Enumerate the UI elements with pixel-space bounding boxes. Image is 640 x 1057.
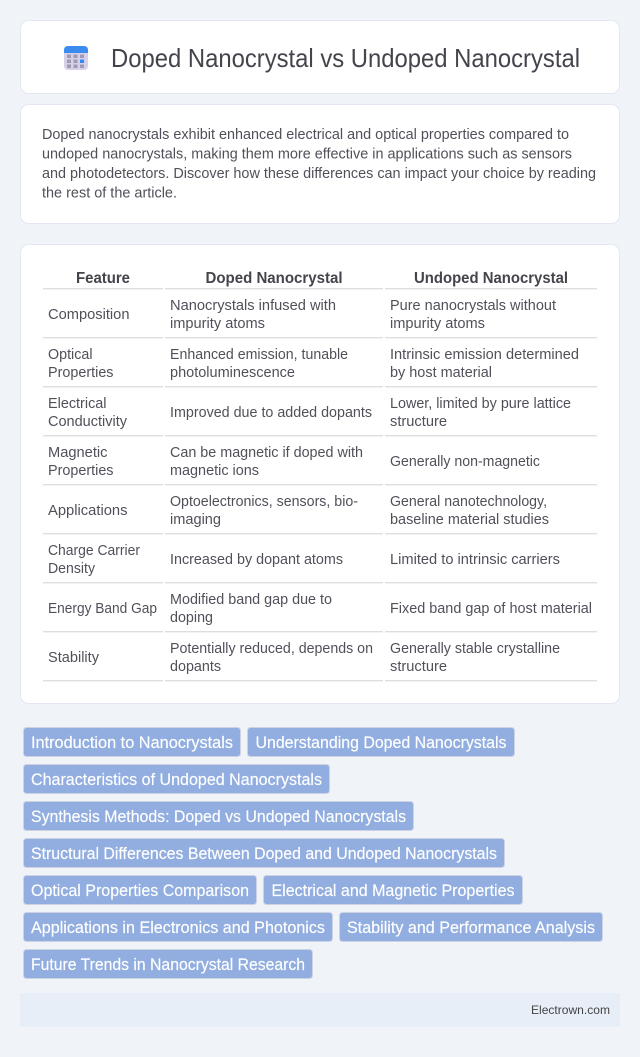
- tag: optical comparison: [24, 876, 256, 904]
- text block: introduction: Doped nanocrystals exhibit enhanced electrical and optical properties compared to: [42, 127, 569, 143]
- row: magnetic properties: magnetic ions: [170, 463, 259, 479]
- row: optical properties: photoluminescence: [170, 365, 295, 381]
- row: magnetic properties: Properties: [48, 463, 114, 479]
- row: optical properties: Intrinsic emission determined: [390, 347, 579, 363]
- tag: applications: [24, 912, 332, 942]
- row: energy band gap: doping: [170, 610, 213, 626]
- topic tags: [24, 728, 602, 978]
- row: applications: [48, 494, 549, 528]
- footer: [20, 993, 620, 1027]
- tag: stability performance: Stability and Performance Analysis: [347, 919, 595, 937]
- row: charge carrier density: Density: [48, 561, 96, 577]
- row: electrical conductivity: [48, 396, 571, 430]
- row: energy band gap: Energy Band Gap: [48, 601, 157, 617]
- row: composition: impurity atoms: [390, 316, 485, 332]
- text block: introduction: [42, 127, 596, 202]
- tag: characteristics undoped: [24, 764, 330, 794]
- row: energy band gap: Modified band gap due to: [170, 592, 332, 608]
- row: stability: Potentially reduced, depends on: [170, 641, 373, 657]
- row: applications: imaging: [170, 512, 221, 528]
- row: electrical conductivity: Conductivity: [48, 414, 128, 430]
- row: electrical conductivity: Electrical: [48, 396, 106, 412]
- panel: header: [20, 20, 620, 94]
- row: magnetic properties: Generally non-magnetic: [390, 454, 540, 470]
- row: stability: Stability: [48, 650, 100, 666]
- row: magnetic properties: [48, 445, 540, 479]
- row: optical properties: [48, 347, 579, 381]
- row: stability: Generally stable crystalline: [390, 641, 560, 657]
- tag: electrical magnetic: [264, 876, 522, 904]
- row: optical properties: Properties: [48, 365, 114, 381]
- tag: optical comparison: Optical Properties Comparison: [31, 882, 249, 900]
- tag: characteristics undoped: Characteristics of Undoped Nanocrystals: [31, 771, 322, 789]
- table header row: Feature: [76, 270, 130, 287]
- row: optical properties: Enhanced emission, tunable: [170, 347, 348, 363]
- text block: introduction: the rest of the article.: [42, 186, 177, 202]
- footer: Electrown.com: [531, 1003, 610, 1017]
- text block: introduction: undoped nanocrystals, making them more effective in applications such as sensors: [42, 146, 572, 162]
- tag: structural differences: Structural Differences Between Doped and Undoped Nanocrystals: [31, 845, 497, 863]
- table header row: Doped Nanocrystal: [206, 270, 342, 287]
- title: Doped Nanocrystal vs Undoped Nanocrystal: [111, 45, 580, 73]
- row: optical properties: by host material: [390, 365, 492, 381]
- row: stability: dopants: [170, 659, 221, 675]
- panel: comparison table: [20, 244, 620, 704]
- tag: synthesis methods: [24, 802, 414, 830]
- row: applications: Applications: [48, 503, 128, 519]
- row: electrical conductivity: Lower, limited by pure lattice: [390, 396, 571, 412]
- row: stability: [48, 641, 560, 675]
- row: electrical conductivity: structure: [390, 414, 447, 430]
- tag: understanding doped: Understanding Doped Nanocrystals: [256, 734, 506, 752]
- tag: understanding doped: [248, 728, 514, 756]
- tag: structural differences: [24, 838, 504, 868]
- row: magnetic properties: Can be magnetic if doped with: [170, 445, 363, 461]
- tag: future trends: [24, 950, 312, 978]
- icon: calendar: [64, 46, 88, 70]
- table header row: [76, 270, 568, 287]
- tag: future trends: Future Trends in Nanocrystal Research: [31, 956, 305, 974]
- panel: introduction: [20, 104, 620, 224]
- tag: introduction: [24, 728, 240, 756]
- row: applications: baseline material studies: [390, 512, 549, 528]
- row: applications: General nanotechnology,: [390, 494, 547, 510]
- table header row: Undoped Nanocrystal: [414, 270, 568, 287]
- row: energy band gap: [48, 592, 592, 626]
- row: electrical conductivity: Improved due to added dopants: [170, 405, 372, 421]
- tag: stability performance: [340, 912, 602, 942]
- row: applications: Optoelectronics, sensors, bio-: [170, 494, 358, 510]
- row: charge carrier density: [48, 543, 560, 577]
- row: stability: structure: [390, 659, 447, 675]
- row: composition: impurity atoms: [170, 316, 265, 332]
- row: composition: Pure nanocrystals without: [390, 298, 556, 314]
- tag: introduction: Introduction to Nanocrystals: [31, 734, 233, 752]
- row: optical properties: Optical: [48, 347, 92, 363]
- tag: electrical magnetic: Electrical and Magnetic Properties: [272, 882, 514, 900]
- row: composition: Composition: [48, 307, 130, 323]
- tag: applications: Applications in Electronics and Photonics: [31, 919, 325, 937]
- tag: synthesis methods: Synthesis Methods: Doped vs Undoped Nanocrystals: [31, 808, 406, 826]
- row: charge carrier density: Increased by dopant atoms: [170, 552, 343, 568]
- row: charge carrier density: Charge Carrier: [48, 543, 140, 559]
- row: charge carrier density: Limited to intrinsic carriers: [390, 552, 560, 568]
- row: composition: [48, 298, 556, 332]
- row: composition: Nanocrystals infused with: [170, 298, 336, 314]
- row: energy band gap: Fixed band gap of host material: [390, 601, 592, 617]
- row: magnetic properties: Magnetic: [48, 445, 108, 461]
- text block: introduction: and photodetectors. Discover how these differences can impact your choice by reading: [42, 166, 596, 182]
